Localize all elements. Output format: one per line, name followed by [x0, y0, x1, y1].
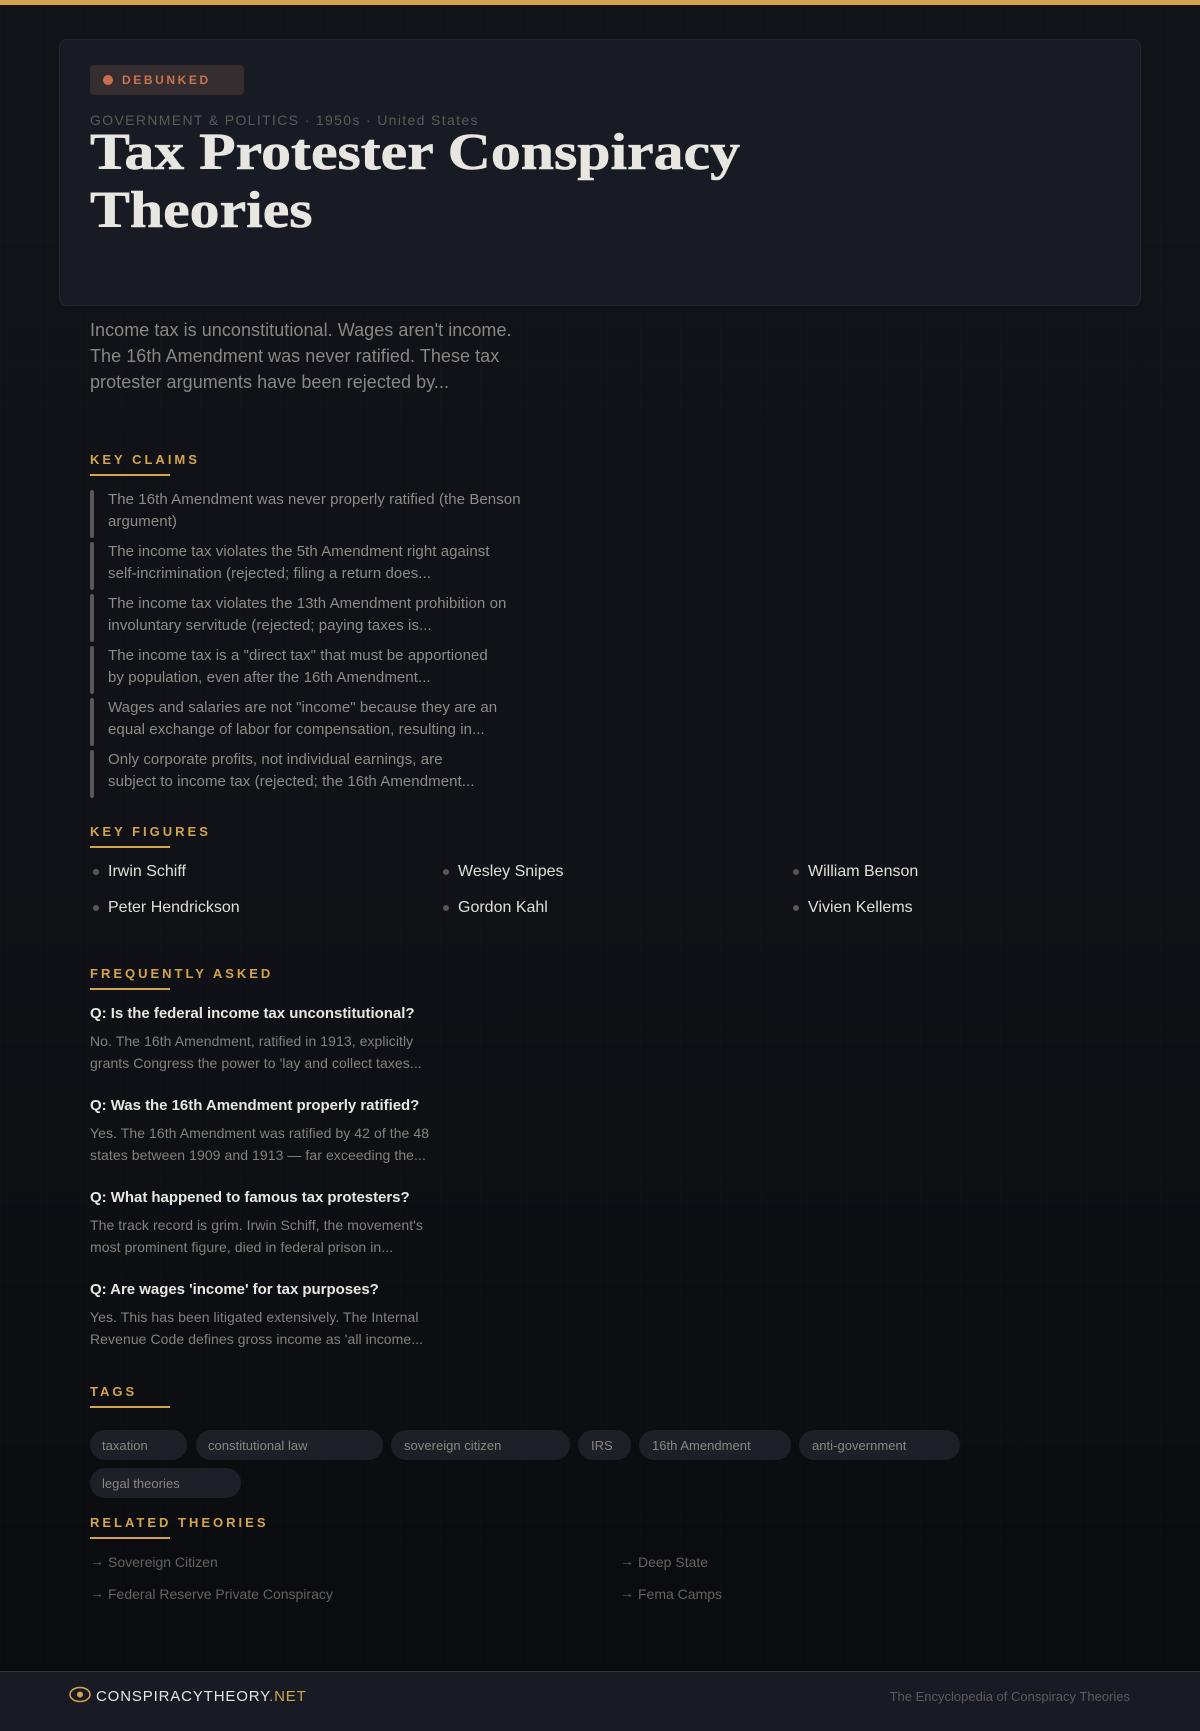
category meta line: GOVERNMENT & POLITICS · 1950s · United States [90, 112, 479, 128]
faq 1: grants Congress the power to 'lay and collect taxes... [90, 1055, 422, 1071]
figure: Wesley Snipes: Wesley Snipes [458, 863, 564, 880]
claim 2 [90, 542, 490, 590]
faq 2 [90, 1097, 429, 1163]
faq 1: No. The 16th Amendment, ratified in 1913, explicitly [90, 1033, 413, 1049]
intro text: protester arguments have been rejected by... [90, 372, 449, 392]
title: Theories [90, 182, 313, 238]
tag: legal theories [90, 1468, 241, 1498]
related: Sovereign Citizen: Sovereign Citizen [108, 1554, 218, 1570]
related: Federal Reserve Private Conspiracy: → [90, 1585, 104, 1601]
claim 3: The income tax violates the 13th Amendment prohibition on [108, 595, 506, 612]
figure: William Benson: William Benson [808, 863, 918, 880]
tag: constitutional law [196, 1430, 383, 1460]
claim 5: equal exchange of labor for compensation, resulting in... [108, 721, 485, 738]
status badge: debunked [90, 65, 244, 95]
related: Deep State: → [620, 1553, 634, 1569]
claim 4: by population, even after the 16th Amendment... [108, 669, 431, 686]
faq 4: Revenue Code defines gross income as 'all income... [90, 1331, 423, 1347]
faq 2: Q: Was the 16th Amendment properly ratified? [90, 1097, 419, 1114]
faq 4: Yes. This has been litigated extensively. The Internal [90, 1309, 419, 1325]
claim 2: The income tax violates the 5th Amendment right against [108, 543, 490, 560]
claim 6: Only corporate profits, not individual earnings, are [108, 751, 443, 768]
heading: key figures: KEY FIGURES [90, 824, 211, 839]
heading: frequently asked: FREQUENTLY ASKED [90, 966, 273, 981]
icon: eye logo [69, 1686, 91, 1702]
top accent bar [0, 0, 1200, 5]
tag: 16th Amendment [639, 1430, 791, 1460]
heading: tags: TAGS [90, 1384, 137, 1399]
header panel [59, 39, 1141, 306]
heading: related theories: RELATED THEORIES [90, 1515, 268, 1530]
figure: Gordon Kahl: Gordon Kahl [458, 899, 548, 916]
footer [0, 1671, 1200, 1731]
faq 3: The track record is grim. Irwin Schiff, the movement's [90, 1217, 423, 1233]
related: Sovereign Citizen: → [90, 1553, 104, 1569]
related: Fema Camps: → [620, 1585, 634, 1601]
title: Tax Protester Conspiracy [90, 124, 740, 181]
tag: sovereign citizen [391, 1430, 570, 1460]
claim 1: The 16th Amendment was never properly ratified (the Benson [108, 491, 521, 508]
intro text [90, 320, 512, 392]
tag: anti-government: anti-government [812, 1438, 906, 1453]
tag: anti-government [799, 1430, 960, 1460]
tag: sovereign citizen: sovereign citizen [404, 1438, 501, 1453]
tag: IRS [578, 1430, 631, 1460]
figure: Vivien Kellems: Vivien Kellems [808, 899, 913, 916]
tag: IRS: IRS [591, 1438, 613, 1453]
intro text: The 16th Amendment was never ratified. These tax [90, 346, 499, 366]
badge dot [103, 75, 113, 85]
faq 3: most prominent figure, died in federal prison in... [90, 1239, 393, 1255]
claim 3: involuntary servitude (rejected; paying taxes is... [108, 617, 432, 634]
faq 3: Q: What happened to famous tax protesters? [90, 1189, 410, 1206]
faq 4 [90, 1281, 423, 1347]
footer tagline: The Encyclopedia of Conspiracy Theories [890, 1689, 1130, 1704]
faq 1 [90, 1005, 422, 1071]
tag: taxation: taxation [102, 1438, 148, 1453]
title [90, 124, 740, 238]
related: Deep State: Deep State [638, 1554, 708, 1570]
figure: Peter Hendrickson: Peter Hendrickson [108, 899, 240, 916]
badge text: DEBUNKED [122, 73, 211, 87]
claim 3 [90, 594, 506, 642]
faq 2: Yes. The 16th Amendment was ratified by 42 of the 48 [90, 1125, 429, 1141]
claim 4: The income tax is a "direct tax" that must be apportioned [108, 647, 488, 664]
heading: key claims: KEY CLAIMS [90, 452, 200, 467]
logo wordmark: CONSPIRACYTHEORY.NET [96, 1688, 307, 1705]
intro text: Income tax is unconstitutional. Wages aren't income. [90, 320, 512, 340]
claim 1 [90, 490, 521, 538]
tag: legal theories: legal theories [102, 1476, 180, 1491]
claim 4 [90, 646, 488, 694]
tag: taxation [90, 1430, 187, 1460]
faq 1: Q: Is the federal income tax unconstitutional? [90, 1005, 414, 1022]
faq 2: states between 1909 and 1913 — far exceeding the... [90, 1147, 426, 1163]
claim 6: subject to income tax (rejected; the 16th Amendment... [108, 773, 474, 790]
related: Federal Reserve Private Conspiracy: Federal Reserve Private Conspiracy [108, 1586, 333, 1602]
tag: 16th Amendment: 16th Amendment [652, 1438, 751, 1453]
faq 3 [90, 1189, 423, 1255]
figure: Irwin Schiff: Irwin Schiff [108, 863, 186, 880]
claim 2: self-incrimination (rejected; filing a return does... [108, 565, 431, 582]
claim 5 [90, 698, 497, 746]
claim 6 [90, 750, 474, 798]
tag: constitutional law: constitutional law [208, 1438, 308, 1453]
faq 4: Q: Are wages 'income' for tax purposes? [90, 1281, 379, 1298]
claim 5: Wages and salaries are not "income" because they are an [108, 699, 497, 716]
claim 1: argument) [108, 513, 177, 530]
related: Fema Camps: Fema Camps [638, 1586, 722, 1602]
